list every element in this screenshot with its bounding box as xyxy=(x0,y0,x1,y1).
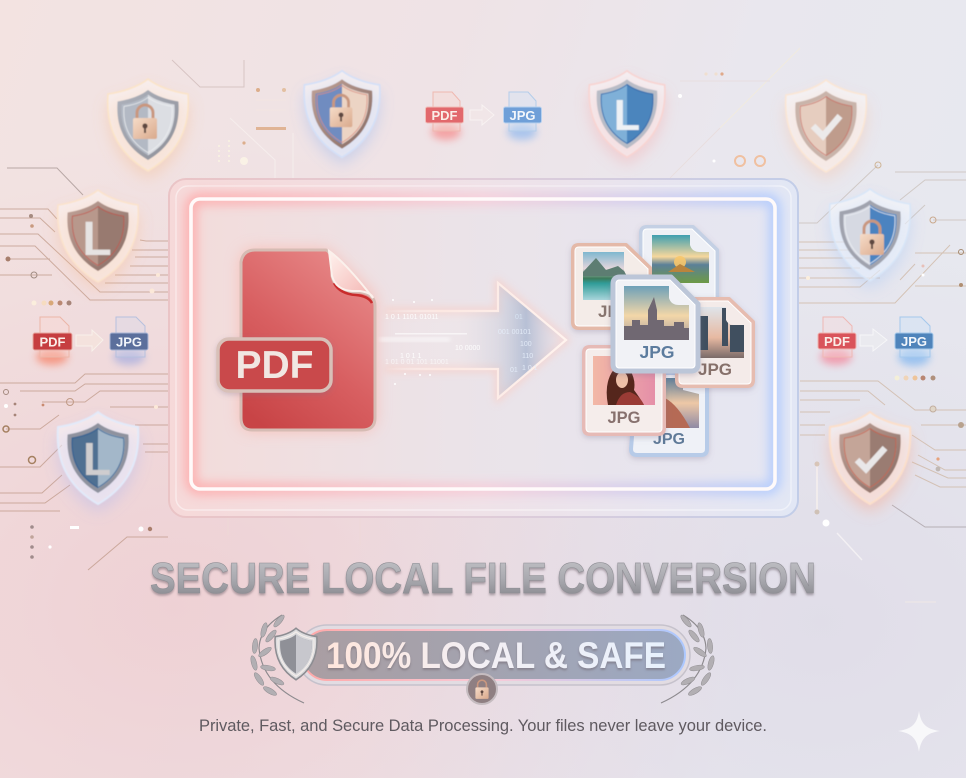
arrow mini icon xyxy=(860,329,887,351)
PDF mini icon: PDF xyxy=(40,334,66,350)
panel inner surface xyxy=(191,199,775,489)
right circuit nodes xyxy=(806,162,964,526)
arrow glow xyxy=(385,283,566,398)
binary data stream xyxy=(385,314,538,374)
neon frame line xyxy=(191,199,775,489)
shield: navy letter L: L xyxy=(83,433,111,485)
binary data stream: 01 xyxy=(515,314,523,321)
panel outer glass frame xyxy=(169,179,798,517)
document folded corner xyxy=(329,251,373,298)
panel glass inner rim xyxy=(176,186,791,510)
pill text: 100% LOCAL & SAFE xyxy=(326,635,666,676)
icon: sparkle xyxy=(898,711,940,752)
binary data stream: 01 xyxy=(510,367,518,374)
JPG mini icon: JPG xyxy=(901,334,927,349)
card: street: JPG xyxy=(698,360,732,379)
PDF mini icon: PDF xyxy=(432,108,458,123)
PDF document icon xyxy=(218,250,375,430)
top circuit nodes xyxy=(219,72,765,166)
format icon: top PDF to JPG xyxy=(426,92,542,140)
shield: brown check xyxy=(830,412,910,512)
JPG mini icon: JPG xyxy=(116,334,142,350)
arrow mini icon xyxy=(76,330,103,351)
badge: 100% local and safe xyxy=(250,614,715,704)
card: portrait xyxy=(584,347,664,434)
pill xyxy=(297,625,690,693)
card: lake xyxy=(573,245,650,328)
binary data stream: 100 xyxy=(520,341,532,348)
PDF label: PDF xyxy=(236,344,314,387)
neon frame glow xyxy=(191,199,775,489)
shield: blue letter L xyxy=(589,71,665,165)
shield: navy letter L xyxy=(58,412,138,512)
card: mountain dusk: JPG xyxy=(653,431,685,448)
document body xyxy=(241,250,375,430)
shield: blue lock right xyxy=(830,189,910,289)
card: city, front xyxy=(613,277,698,371)
circuit lines: top xyxy=(172,48,800,178)
format icon: right PDF to JPG xyxy=(818,317,933,366)
JPG mini icon: JPG xyxy=(509,108,536,123)
arrow outline xyxy=(385,283,566,398)
card: city, front: JPG xyxy=(639,342,675,362)
shield: brown letter L xyxy=(58,190,138,290)
circuit lines: left xyxy=(0,168,168,570)
document fold shadow xyxy=(334,283,372,303)
card: street xyxy=(677,299,753,386)
pill shield xyxy=(275,628,317,680)
shield: brown letter L: L xyxy=(82,213,112,266)
main glass panel xyxy=(169,179,798,517)
data particles xyxy=(380,299,467,385)
format icon: left PDF to JPG xyxy=(33,317,148,365)
laurel right xyxy=(661,614,715,703)
title: SECURE LOCAL FILE CONVERSION xyxy=(150,554,816,603)
pill lock button xyxy=(467,674,497,704)
laurel left xyxy=(250,614,304,703)
binary data stream: 1 01 0 01 101 11001 xyxy=(385,359,449,366)
arrow shape xyxy=(385,283,566,398)
binary data stream: 1 0 1 1101 01011 xyxy=(385,314,439,321)
JPG card stack xyxy=(573,227,753,455)
shield: silver lock xyxy=(108,79,188,179)
shield: peach check xyxy=(786,80,866,180)
circuit lines: right xyxy=(228,165,966,602)
binary data stream: 1 0 1 1 xyxy=(400,353,422,360)
card: lake: JPG xyxy=(598,302,632,321)
PDF mini icon: PDF xyxy=(824,334,850,349)
document glow xyxy=(241,250,375,430)
left circuit nodes xyxy=(3,214,160,559)
shield: blue letter L: L xyxy=(614,92,640,140)
binary data stream: 001 00101 xyxy=(498,329,531,336)
binary data stream: 110 xyxy=(522,353,533,360)
shield: blue lock xyxy=(304,71,380,165)
conversion arrow xyxy=(380,283,566,398)
arrow mini icon xyxy=(470,105,494,125)
card: sunset xyxy=(641,227,717,303)
tagline: Private, Fast, and Secure Data Processing. Your files never leave your device. xyxy=(199,717,767,735)
PDF label xyxy=(218,339,331,391)
binary data stream: 10 0000 xyxy=(455,345,480,352)
card: mountain dusk xyxy=(631,373,707,455)
binary data stream: 1 0 1 xyxy=(522,365,538,372)
card: portrait: JPG xyxy=(607,409,641,427)
